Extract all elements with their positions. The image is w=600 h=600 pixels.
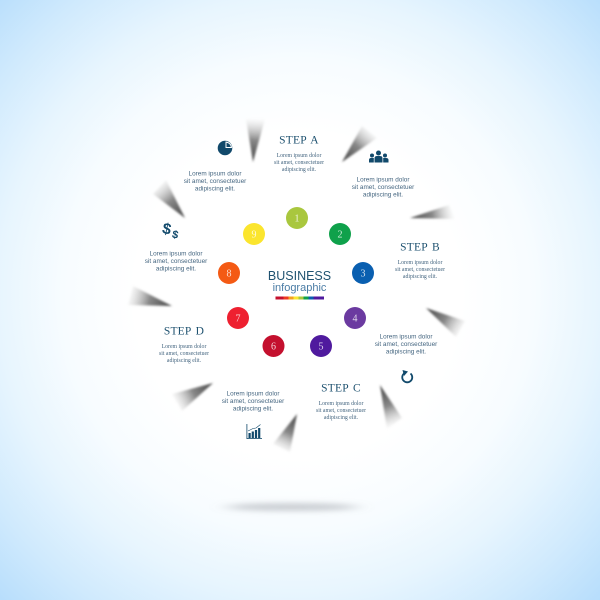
icon: bar chart xyxy=(246,424,262,439)
step D xyxy=(159,326,209,364)
step B: STEP B xyxy=(400,242,440,254)
folded wedge shadows xyxy=(128,119,465,452)
text: left: Lorem ipsum dolor xyxy=(150,250,203,257)
text: top left xyxy=(184,170,247,193)
circle 8: 8 xyxy=(226,268,232,280)
step A: sit amet, consectetuer xyxy=(274,160,324,166)
text: left: sit amet, consectetuer xyxy=(145,258,208,265)
text: lower right xyxy=(375,333,438,356)
text: top right: sit amet, consectetuer xyxy=(352,184,415,191)
step A: STEP A xyxy=(279,134,319,146)
step B: sit amet, consectetuer xyxy=(395,267,445,273)
text: lower right: Lorem ipsum dolor xyxy=(380,333,433,340)
circle 2 xyxy=(329,223,351,245)
icon: dollar signs: $ xyxy=(171,229,179,242)
text: top left: sit amet, consectetuer xyxy=(184,178,247,185)
icon: refresh arrow xyxy=(402,370,412,382)
text: bottom left: adipiscing elit. xyxy=(233,406,273,413)
text: top right: Lorem ipsum dolor xyxy=(357,176,410,183)
circle 7: 7 xyxy=(236,314,240,324)
circle 5 xyxy=(310,335,332,357)
circle 3 xyxy=(352,262,374,284)
step A: Lorem ipsum dolor xyxy=(277,153,321,159)
text: top left: Lorem ipsum dolor xyxy=(189,170,242,177)
text: top right xyxy=(352,176,415,199)
text: bottom left xyxy=(222,390,285,413)
circle 7 xyxy=(227,307,249,329)
step A xyxy=(274,134,324,173)
ground shadow xyxy=(226,503,358,511)
step B: adipiscing elit. xyxy=(403,274,438,280)
circle 4: 4 xyxy=(352,314,358,324)
circle 5: 5 xyxy=(318,342,324,352)
center title: BUSINESS xyxy=(268,269,331,283)
circle 6 xyxy=(262,335,284,357)
step C: adipiscing elit. xyxy=(324,415,359,421)
step C: Lorem ipsum dolor xyxy=(319,401,363,407)
step C: STEP C xyxy=(321,382,361,394)
step B xyxy=(395,242,445,280)
circle 4 xyxy=(344,307,366,329)
text: left: adipiscing elit. xyxy=(156,266,196,273)
circle 3: 3 xyxy=(360,268,366,280)
circle 1: 1 xyxy=(294,214,300,224)
step C xyxy=(316,382,366,421)
step D: adipiscing elit. xyxy=(167,358,202,364)
step A: adipiscing elit. xyxy=(282,167,317,173)
center title xyxy=(268,269,331,300)
step D: STEP D xyxy=(164,326,204,338)
text: top left: adipiscing elit. xyxy=(195,186,235,193)
text: left xyxy=(145,250,208,273)
icon: dollar signs xyxy=(161,220,179,242)
text: bottom left: Lorem ipsum dolor xyxy=(227,390,280,397)
circle 1 xyxy=(286,207,308,229)
text: top right: adipiscing elit. xyxy=(363,192,403,199)
text: lower right: adipiscing elit. xyxy=(386,349,426,356)
icon: people xyxy=(369,150,388,162)
step B: Lorem ipsum dolor xyxy=(398,260,442,266)
step D: sit amet, consectetuer xyxy=(159,351,209,357)
circle 8 xyxy=(218,262,240,284)
center title: infographic xyxy=(273,282,327,294)
circle 6: 6 xyxy=(271,342,276,352)
icon: dollar signs: $ xyxy=(161,220,173,239)
step circles xyxy=(218,207,374,357)
circle 9 xyxy=(243,223,265,245)
step D: Lorem ipsum dolor xyxy=(162,344,206,350)
step C: sit amet, consectetuer xyxy=(316,408,366,414)
icon: pie chart xyxy=(218,141,232,155)
text: bottom left: sit amet, consectetuer xyxy=(222,398,285,405)
text: lower right: sit amet, consectetuer xyxy=(375,341,438,348)
circle 2: 2 xyxy=(338,230,342,240)
circle 9: 9 xyxy=(252,230,256,240)
